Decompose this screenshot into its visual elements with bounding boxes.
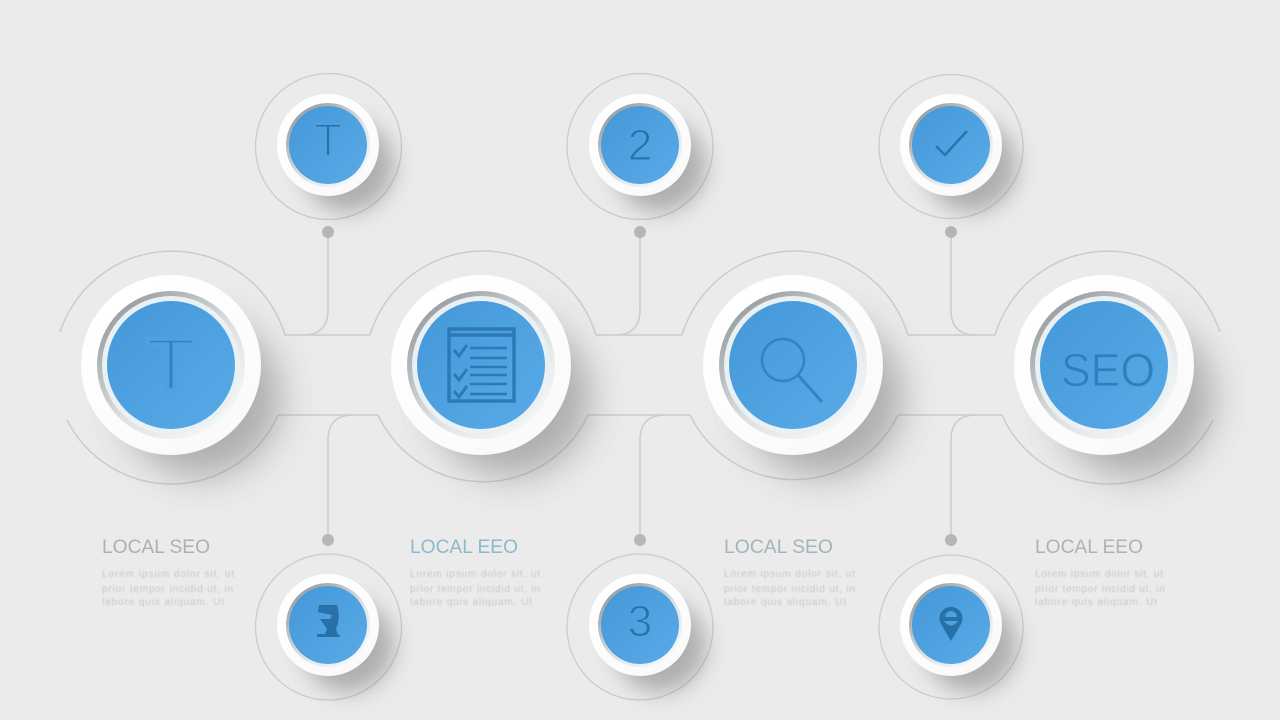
body copy 4: Lorem ipsum dolor sit, ut: [1035, 569, 1163, 580]
text block 4: [1035, 537, 1165, 608]
arcs around step 4: [995, 251, 1220, 484]
arcs around step 1: [60, 251, 285, 484]
step 4 large button: SEO: [1014, 275, 1214, 477]
icon: person bust: [317, 605, 340, 637]
top small button: T: [277, 94, 394, 212]
body copy 2: labore quis aliquam. Ut: [410, 597, 532, 608]
connector network: [60, 232, 1220, 540]
body copy 1: labore quis aliquam. Ut: [102, 597, 224, 608]
body copy 2: [410, 569, 540, 608]
body copy 1: prior tempor incidid ut, in: [102, 584, 233, 595]
body copy 3: prior tempor incidid ut, in: [724, 584, 855, 595]
body copy 2: prior tempor incidid ut, in: [410, 584, 540, 595]
bottom small button: map pin: [900, 574, 1017, 692]
heading 1: LOCAL SEO: [102, 537, 210, 558]
icon: check mark: [936, 131, 967, 155]
icon: SEO word: SEO: [1061, 344, 1155, 396]
body copy 3: Lorem ipsum dolor sit, ut: [724, 569, 855, 580]
icon: number 3: 3: [628, 597, 652, 646]
top branch lines: [303, 232, 976, 335]
bottom small button: person: [277, 574, 394, 692]
body copy 3: labore quis aliquam. Ut: [724, 597, 846, 608]
body copy 1: Lorem ipsum dolor sit, ut: [102, 569, 234, 580]
horizontal links: [278, 335, 1002, 415]
icon: checklist document: [449, 329, 514, 401]
text block 3: [724, 537, 855, 608]
text block 2: [410, 537, 540, 608]
top connector dots: [322, 226, 957, 238]
step 1 large button: T: [81, 275, 281, 477]
arcs around step 3: [682, 251, 908, 480]
heading 2: LOCAL EEO: [410, 537, 518, 558]
step 2 large button: checklist: [391, 275, 591, 477]
top small button: check: [900, 94, 1017, 212]
heading 4: LOCAL EEO: [1035, 537, 1143, 558]
bottom connector dots: [322, 534, 957, 546]
icon: letter T: T: [146, 324, 196, 406]
bottom branch lines: [328, 415, 976, 540]
icon: number 2: 2: [628, 121, 652, 170]
arcs around step 2: [370, 251, 596, 482]
text block 1: [102, 537, 234, 608]
body copy 3: [724, 569, 855, 608]
top small button: 2: [589, 94, 706, 212]
step 3 large button: magnifier: [703, 275, 903, 477]
body copy 2: Lorem ipsum dolor sit, ut: [410, 569, 540, 580]
body copy 4: [1035, 569, 1165, 608]
body copy 4: labore quis aliquam. Ut: [1035, 597, 1157, 608]
small outer rings: [256, 74, 1023, 700]
body copy 1: [102, 569, 234, 608]
heading 3: LOCAL SEO: [724, 537, 833, 558]
icon: small T: T: [314, 114, 342, 166]
bottom small button: 3: [589, 574, 706, 692]
icon: map pin: [940, 607, 962, 641]
icon: magnifying glass: [762, 339, 822, 402]
body copy 4: prior tempor incidid ut, in: [1035, 584, 1165, 595]
